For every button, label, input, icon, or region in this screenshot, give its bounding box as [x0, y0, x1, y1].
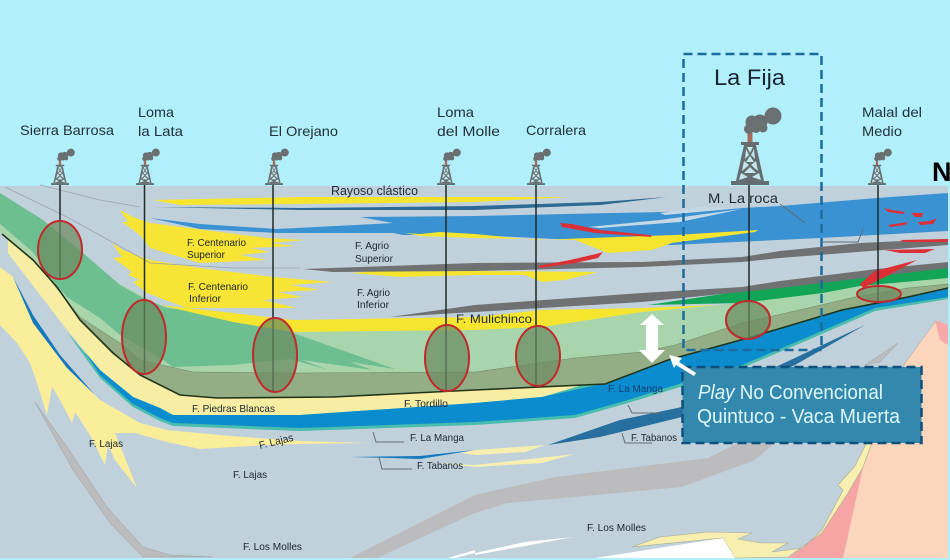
layer: pale yellow Lajas wedge	[0, 267, 367, 488]
label: Sierra Barrosa: Sierra Barrosa	[20, 122, 114, 138]
label: F. Lajas left: F. Lajas	[89, 438, 123, 450]
heading: well names	[20, 65, 950, 187]
well: La Fija	[731, 108, 782, 339]
layer: white lenses	[448, 537, 735, 558]
label: F. Centenario Superior: F. Centenario	[187, 237, 246, 249]
layer: teal rim of La Manga	[67, 288, 948, 431]
label: F. Agrio Inferior	[357, 287, 390, 311]
layer: blue Agrio band	[150, 193, 948, 245]
label: Loma la Lata: Loma	[138, 104, 174, 120]
layer: blue La Manga	[85, 288, 948, 428]
layer: gray band right	[350, 443, 775, 558]
label: F. Tabanos centre: F. Tabanos	[417, 460, 463, 472]
layer: salmon basement	[843, 322, 948, 558]
label: Corralera: Corralera	[526, 122, 586, 138]
label: Malal del Medio: Malal del	[862, 104, 922, 120]
label: F. Agrio Inferior: F. Agrio	[357, 287, 390, 299]
dashed box: La Fija	[684, 54, 822, 350]
label: F. Mulichinco: F. Mulichinco	[456, 312, 532, 326]
arrow: white double arrow	[639, 314, 665, 363]
layer: black base line	[2, 234, 948, 398]
layer: dark blue Tabanos wedge	[548, 325, 865, 445]
layer: yellow Centenario Inferior	[112, 243, 333, 308]
well: Corralera	[527, 149, 551, 386]
layer: pink basement	[935, 320, 948, 345]
leader lines	[373, 204, 863, 469]
label: F. Agrio Inferior: Inferior	[357, 299, 389, 311]
layer: yellow Rayoso	[153, 197, 570, 205]
callout: Play No Convencional	[682, 367, 922, 443]
callout: Play No Convencional: Play No Convencional	[698, 382, 883, 404]
layer: pink wedge	[788, 467, 863, 558]
layer: dark gray upper band	[303, 239, 948, 272]
label: M. La roca: M. La roca	[708, 191, 779, 206]
well: Sierra Barrosa	[51, 149, 75, 280]
label: F. Los Molles left: F. Los Molles	[243, 541, 302, 553]
layer: pale streaks	[588, 207, 742, 228]
label: F. Lajas centre: F. Lajas	[233, 469, 267, 481]
label: F. Los Molles right: F. Los Molles	[587, 522, 646, 534]
label: F. Tordillo: F. Tordillo	[404, 398, 448, 410]
panel: geological cross-section	[0, 185, 948, 558]
reservoir ellipses	[38, 221, 901, 392]
layer: blue Tabanos lens	[350, 450, 475, 459]
layer: pale yellow basement edge and spikes	[632, 363, 905, 558]
thin gray lines	[5, 185, 300, 268]
label: F. Centenario Inferior: F. Centenario	[188, 281, 248, 293]
callout: Play No Convencional: Quintuco - Vaca Muerta	[697, 406, 901, 428]
layer: dark gray lower band	[390, 262, 948, 317]
wells and derricks	[51, 108, 892, 391]
layer: medium green	[0, 193, 395, 370]
label: F. Agrio Superior: Superior	[355, 253, 393, 265]
well: Loma del Molle	[437, 149, 461, 390]
label: F. Agrio Superior	[355, 240, 393, 265]
label: Loma la Lata: la Lata	[138, 123, 183, 139]
label: F. Centenario Superior: Superior	[187, 249, 225, 261]
label: F. Tabanos right: F. Tabanos	[631, 432, 677, 444]
layer: yellow Agrio Superior	[405, 230, 758, 253]
label: F. La Manga in blue: F. La Manga	[608, 383, 663, 395]
layer: gray band left	[35, 402, 213, 557]
label: El Orejano: El Orejano	[269, 123, 338, 139]
layer: yellow Centenario Superior	[120, 210, 305, 263]
label: Loma del Molle: Loma	[437, 104, 474, 120]
well: Malal del Medio	[868, 149, 892, 302]
label: F. Centenario Inferior	[188, 281, 248, 305]
layer: blue lens in Lajas	[13, 277, 95, 395]
label: F. Centenario Superior	[187, 237, 246, 261]
ground: Los Molles and Lajas base	[0, 186, 948, 558]
label: F. Piedras Blancas: F. Piedras Blancas	[192, 403, 275, 415]
label: F. La Manga: F. La Manga	[410, 432, 464, 444]
label: F. Centenario Inferior: Inferior	[189, 293, 221, 305]
well: Loma la Lata	[136, 149, 160, 373]
layer: pale Tordillo and Piedras Blancas	[8, 240, 605, 416]
label: Malal del Medio: Medio	[862, 123, 902, 139]
well: El Orejano	[265, 149, 289, 391]
arrow: pointer to source rock	[669, 355, 696, 376]
layer: dark blue thin	[153, 197, 667, 210]
layer: olive source rock	[50, 280, 948, 398]
labels: formations	[89, 184, 779, 553]
label: La Fija: La Fija	[714, 65, 786, 90]
label: Rayoso clástico: Rayoso clástico	[331, 184, 418, 198]
label: Loma del Molle	[437, 104, 500, 139]
label: Loma del Molle: del Molle	[437, 123, 500, 139]
label: Malal del Medio	[862, 104, 922, 139]
layer: yellow under gray band	[350, 267, 598, 282]
label: F. Lajas rotated: F. Lajas	[258, 432, 295, 452]
layer: light green	[0, 220, 948, 397]
label: Loma la Lata	[138, 104, 183, 139]
layer: dark green	[648, 267, 948, 305]
red streaks	[538, 208, 948, 288]
label: F. Agrio Superior: F. Agrio	[355, 240, 389, 252]
layer: gray wisps	[865, 322, 935, 365]
layer: pale lenses	[440, 445, 575, 467]
layer: yellow Mulichinco	[160, 305, 718, 332]
